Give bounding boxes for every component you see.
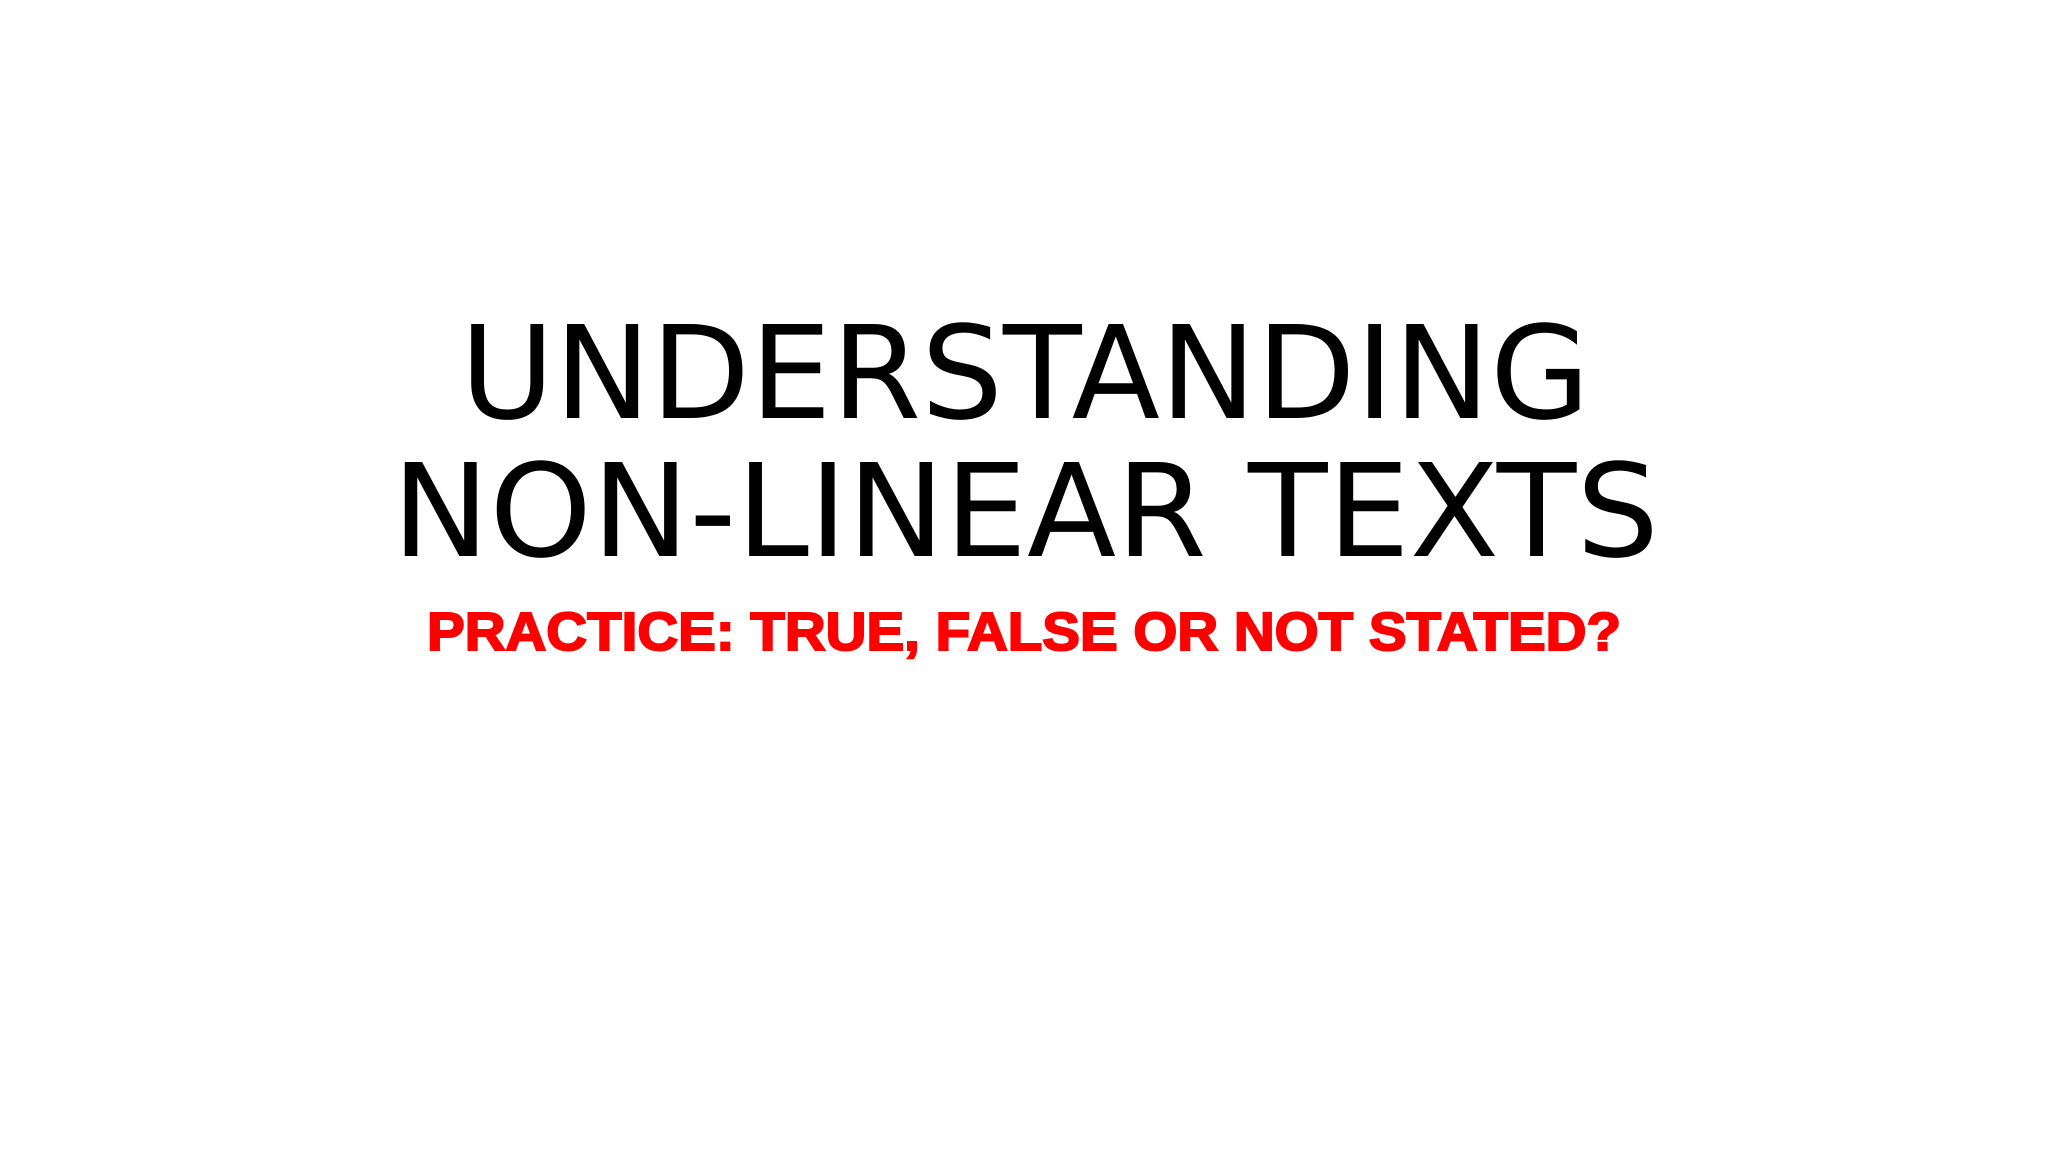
title: [392, 299, 1659, 587]
title: NON-LINEAR TEXTS: [392, 437, 1659, 587]
subtitle: PRACTICE: TRUE, FALSE OR NOT STATED?: [427, 602, 1621, 662]
title: UNDERSTANDING: [460, 299, 1590, 449]
